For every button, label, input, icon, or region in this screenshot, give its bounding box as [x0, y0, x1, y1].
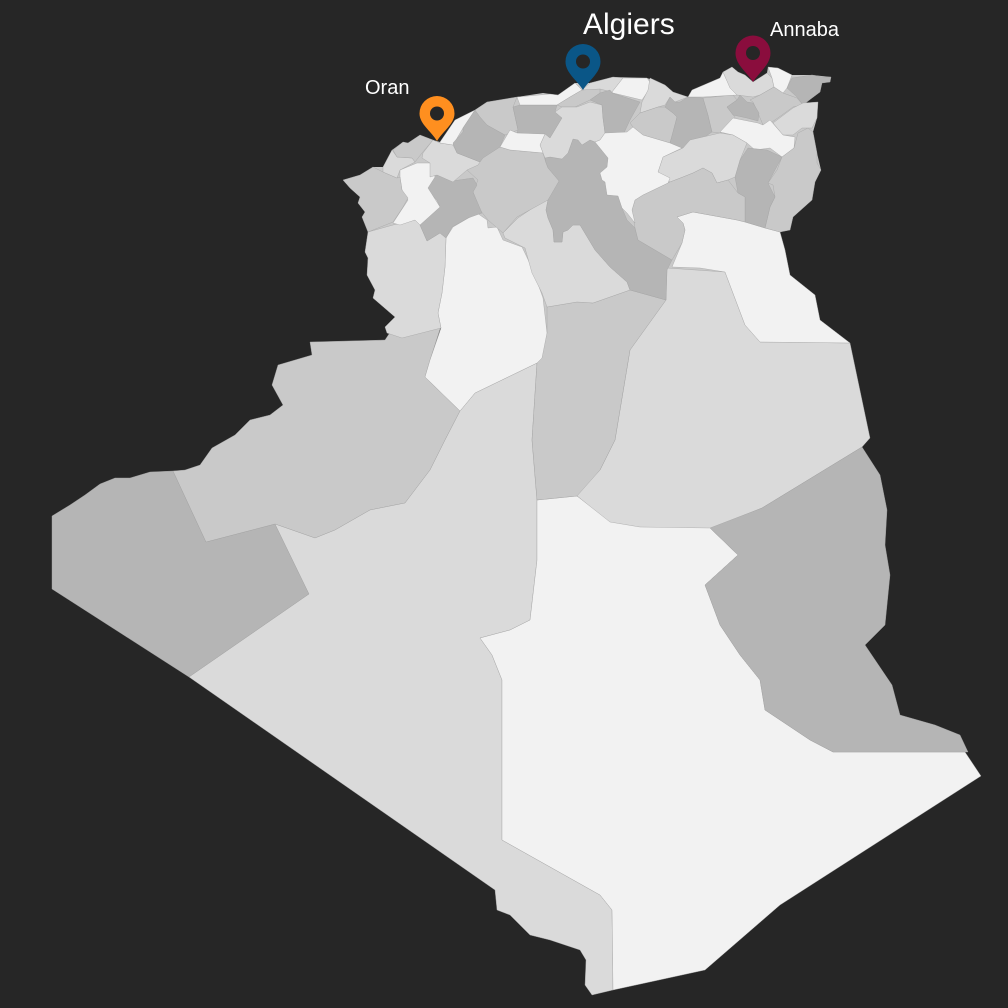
region: Blida	[557, 88, 600, 107]
region: Skikda	[723, 67, 774, 97]
region: Annaba	[768, 67, 792, 93]
region: Batna	[720, 118, 795, 157]
region: Setif	[703, 95, 737, 133]
region: Bordj Bou Arreridj	[630, 107, 677, 143]
region: Tissemsilt	[500, 130, 545, 153]
region: Naama	[365, 220, 446, 338]
region: Sidi Bel Abbes	[393, 163, 440, 225]
pin: Algiers	[566, 44, 600, 90]
region: Ouled Djellal	[632, 168, 745, 260]
region: Mascara	[422, 140, 480, 182]
region: Chlef	[475, 97, 518, 135]
region: Tlemcen	[343, 167, 408, 232]
region: Biskra	[658, 133, 747, 183]
region: Bechar	[173, 326, 460, 542]
region: Ghardaia south	[532, 290, 666, 500]
region: Bejaia	[640, 78, 688, 113]
region: Illizi	[705, 447, 968, 752]
region: Mostaganem	[440, 110, 475, 145]
region: Bouira	[590, 90, 640, 135]
region: Relizane	[453, 110, 505, 162]
region: El Oued	[672, 212, 850, 343]
region: Saida	[420, 175, 482, 241]
label: Algiers: Algiers	[583, 8, 675, 41]
region: Tebessa	[765, 128, 821, 232]
pin: Annaba	[736, 36, 770, 82]
region: Tizi Ouzou	[612, 78, 652, 100]
northern base fill	[343, 67, 850, 393]
region: El Tarf	[787, 75, 831, 105]
region: Jijel	[688, 72, 737, 97]
region: Medea	[540, 102, 605, 159]
pin: Oran	[420, 96, 454, 141]
region: Guelma	[750, 87, 803, 125]
region: Tiaret	[467, 147, 559, 233]
region: Ain Temouchent	[383, 150, 415, 178]
region: Oran	[393, 135, 433, 162]
region: Ouargla	[576, 268, 870, 529]
region: Souk Ahras	[773, 102, 818, 135]
region: M'Sila	[665, 97, 712, 148]
label: Annaba: Annaba	[770, 19, 840, 41]
region: Adrar	[189, 363, 613, 995]
region: Tipaza	[517, 83, 582, 105]
label: Oran: Oran	[365, 77, 409, 99]
region: Djelfa	[595, 127, 682, 223]
region: Constantine	[727, 95, 759, 121]
region: El Bayadh	[503, 200, 630, 307]
region: Ain Defla	[513, 105, 562, 138]
region: Boumerdes	[582, 77, 623, 92]
region: Laghouat	[545, 139, 672, 300]
region: Tamanrasset	[480, 496, 981, 990]
region: Tindouf	[52, 471, 309, 677]
region: Timimoun	[425, 213, 547, 411]
region: Khenchela	[735, 148, 782, 228]
